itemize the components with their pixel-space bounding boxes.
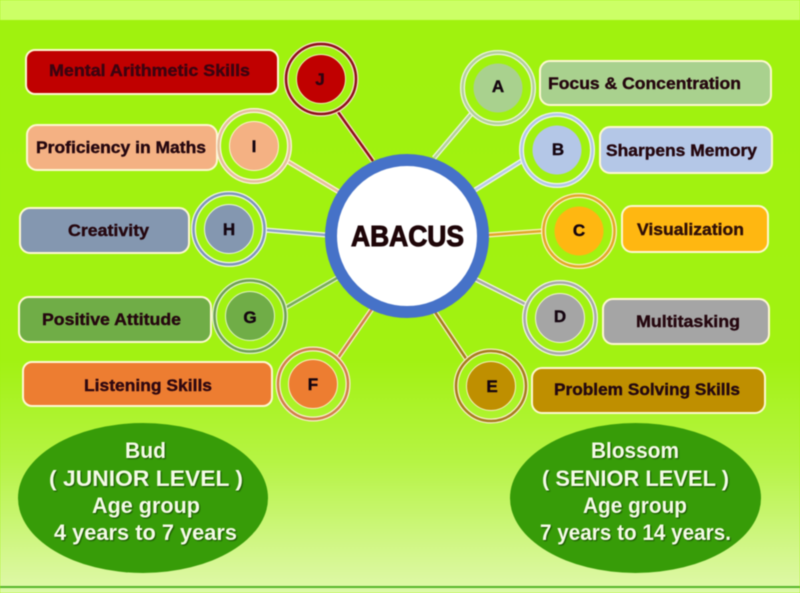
node A: Focus and Concentration: Focus & Concentration bbox=[548, 74, 741, 93]
connector: D bbox=[475, 279, 527, 305]
connector: G bbox=[285, 278, 337, 308]
connector: I bbox=[287, 161, 339, 192]
node D: Multitasking: Multitasking bbox=[636, 312, 740, 331]
node F: Listening Skills: Listening Skills bbox=[84, 376, 212, 395]
node E: Problem Solving Skills: Problem Solving Skills bbox=[554, 380, 740, 399]
connector: A bbox=[434, 113, 472, 158]
connector: H bbox=[265, 230, 326, 235]
panel: senior level: Blossom bbox=[591, 438, 679, 463]
panel: junior level: Age group bbox=[92, 493, 200, 518]
node E: Problem Solving Skills: E bbox=[486, 377, 498, 396]
panel: senior level: ( SENIOR LEVEL ) bbox=[542, 466, 729, 491]
node F: Listening Skills bbox=[23, 349, 348, 419]
panel: senior level: Age group bbox=[583, 493, 687, 518]
node J: Mental Arithmetic Skills: J bbox=[315, 70, 325, 89]
node C: Visualization bbox=[544, 196, 768, 266]
connector: F bbox=[338, 309, 372, 358]
node I: Proficiency in Maths: I bbox=[252, 137, 256, 156]
node D: Multitasking bbox=[524, 282, 769, 354]
node C: Visualization: C bbox=[573, 221, 585, 240]
node D: Multitasking: D bbox=[554, 307, 566, 326]
node B: Sharpens Memory bbox=[522, 114, 772, 186]
node E: Problem Solving Skills bbox=[456, 351, 765, 421]
node H: Creativity: H bbox=[223, 220, 235, 239]
connector: J bbox=[338, 112, 373, 161]
node G: Positive Attitude bbox=[19, 280, 286, 352]
central hub: ABACUS bbox=[331, 160, 483, 312]
node B: Sharpens Memory: Sharpens Memory bbox=[606, 141, 758, 160]
node C: Visualization: Visualization bbox=[637, 220, 744, 239]
node I: Proficiency in Maths: Proficiency in Maths bbox=[36, 138, 206, 157]
node A: Focus and Concentration bbox=[462, 52, 771, 124]
connector: E bbox=[435, 312, 467, 360]
node J: Mental Arithmetic Skills bbox=[26, 44, 356, 114]
panel: senior level bbox=[510, 423, 761, 573]
panel: junior level bbox=[18, 423, 268, 573]
node H: Creativity bbox=[20, 194, 264, 264]
panel: junior level: 4 years to 7 years bbox=[54, 520, 237, 545]
node I: Proficiency in Maths bbox=[27, 110, 290, 182]
node G: Positive Attitude: G bbox=[243, 308, 257, 327]
node F: Listening Skills: F bbox=[308, 375, 318, 394]
connector: B bbox=[475, 160, 523, 190]
node A: Focus and Concentration: A bbox=[492, 77, 504, 96]
node B: Sharpens Memory: B bbox=[552, 140, 564, 159]
panel: junior level: Bud bbox=[125, 438, 166, 463]
panel: senior level: 7 years to 14 years. bbox=[540, 520, 731, 545]
node J: Mental Arithmetic Skills: Mental Arithmetic Skills bbox=[49, 61, 250, 80]
node G: Positive Attitude: Positive Attitude bbox=[42, 310, 181, 329]
connector: C bbox=[488, 231, 544, 235]
hub label: ABACUS bbox=[351, 221, 464, 253]
node H: Creativity: Creativity bbox=[68, 221, 150, 240]
panel: junior level: ( JUNIOR LEVEL ) bbox=[49, 466, 243, 491]
